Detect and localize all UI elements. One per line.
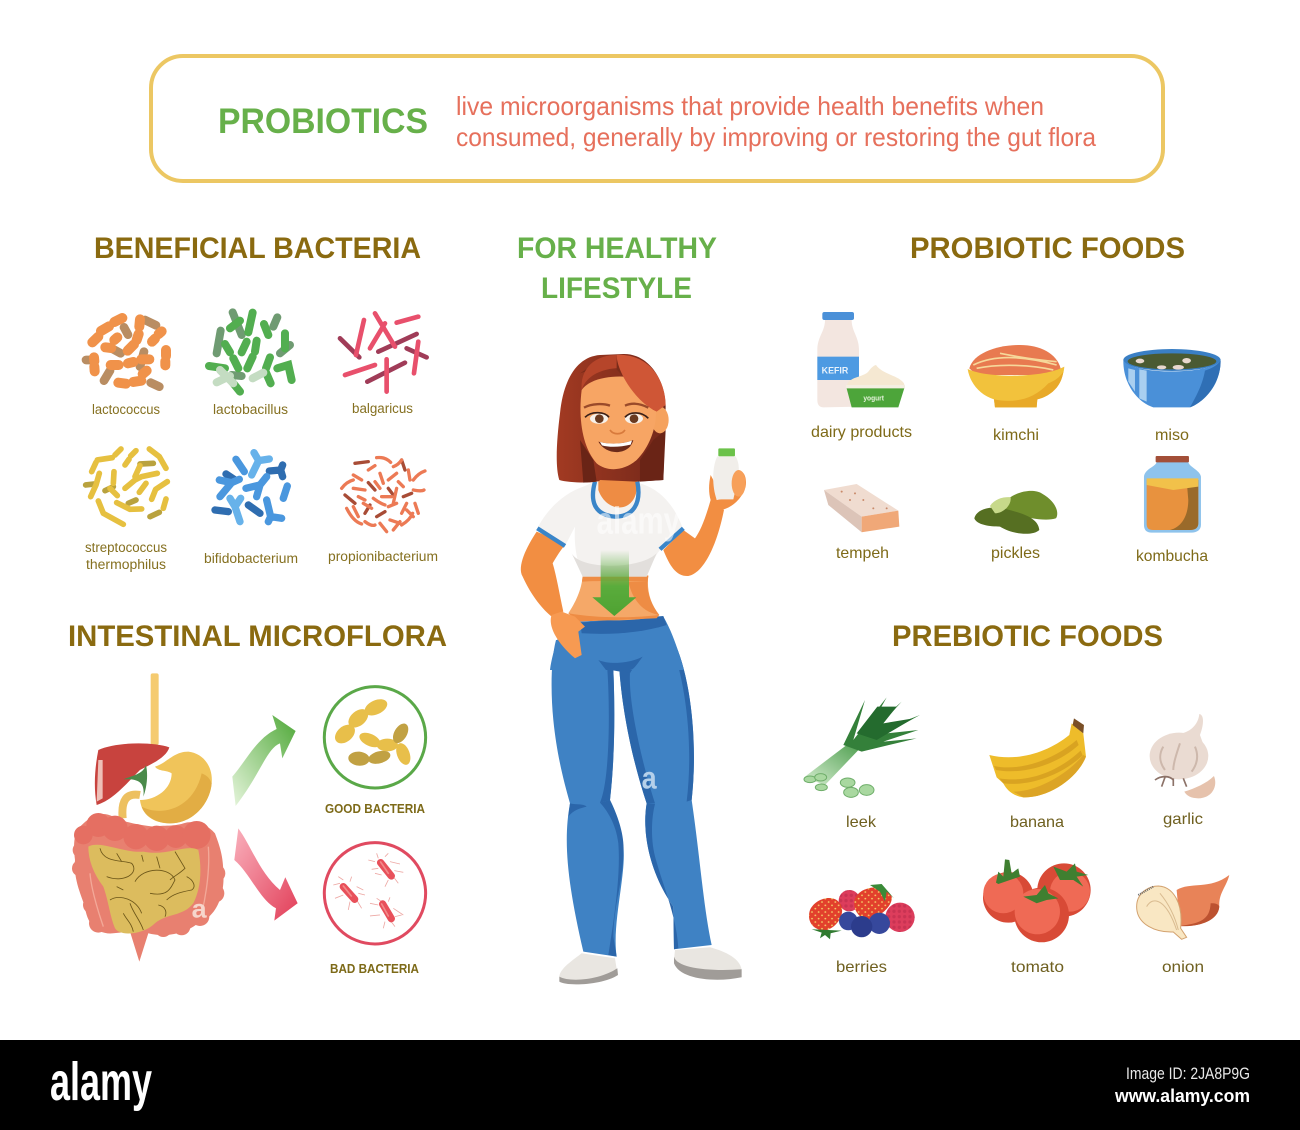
label: bad bacteria: BAD BACTERIA [330,961,420,976]
torso, arms and head: alamy [597,499,681,542]
icon: kimchi [968,345,1064,407]
logo: alamy: alamy [50,1052,152,1112]
heading: prebiotic foods: PREBIOTIC FOODS [892,620,1163,653]
heading: beneficial bacteria: BENEFICIAL BACTERIA [94,232,421,265]
definition text: live microorganisms that provide health benefits when [456,91,1044,121]
icon: lactococcus [86,318,166,387]
label: banana: banana [1010,814,1064,831]
definition box [151,56,1163,181]
torso, arms and head [521,354,746,670]
label: tomato: tomato [1011,959,1064,976]
image id: Image ID: 2JA8P9G [1126,1064,1250,1083]
label: garlic: garlic [1163,811,1203,828]
term: probiotics: PROBIOTICS [218,102,428,141]
label: kombucha: kombucha [1136,548,1208,565]
label: good bacteria: GOOD BACTERIA [325,801,426,816]
label: streptococcus thermophilus [85,540,167,572]
icon: dairy products: yogurt [863,394,884,403]
label: onion: onion [1162,959,1204,976]
legs and shoes [552,640,742,984]
icon: dairy products: KEFIR [822,365,849,375]
label: leek: leek [846,814,877,831]
panel: prebiotic foods [804,697,1229,976]
icon: bifidobacterium [215,453,287,522]
label: berries: berries [836,959,887,976]
icon: good bacteria circle [324,687,426,788]
heading: probiotic foods: PROBIOTIC FOODS [910,232,1185,265]
label: miso: miso [1155,427,1189,444]
footer bar [0,1040,1300,1130]
illustration: woman holding probiotic bottle [521,354,746,984]
label: bifidobacterium: bifidobacterium [204,551,298,566]
heading: for healthy lifestyle: LIFESTYLE [541,272,692,305]
label: lactococcus: lactococcus [92,402,160,417]
label: lactobacillus: lactobacillus [213,402,288,417]
website: www.alamy.com [1114,1086,1250,1106]
icon: balgaricus [340,313,427,392]
heading: intestinal microflora: INTESTINAL MICROFLORA [68,620,447,653]
icon: banana [989,718,1086,797]
icon: bad bacteria circle [324,843,426,944]
label: streptococcus thermophilus: streptococcus [85,540,167,555]
label: balgaricus: balgaricus [352,401,413,416]
icon: kombucha [1144,456,1201,533]
icon: digestive system: a [192,893,207,923]
heading: for healthy lifestyle [517,232,717,305]
label: kimchi: kimchi [993,427,1039,444]
icon: miso [1123,349,1221,407]
label: tempeh: tempeh [836,545,889,562]
arrow: to bad bacteria [234,828,298,921]
panel: beneficial bacteria grid [85,312,438,572]
icon: lactobacillus [209,312,292,392]
label: propionibacterium: propionibacterium [328,549,438,564]
panel: probiotic foods [811,312,1221,565]
label: dairy products: dairy products [811,424,912,441]
icon: tomato [983,859,1091,942]
icon: tempeh [824,484,899,532]
icon: leek [804,697,920,797]
definition text: consumed, generally by improving or restoring the gut flora [456,122,1097,152]
icon: dairy products [817,312,905,407]
icon: garlic [1150,714,1215,798]
definition text [456,91,1097,152]
icon: pickles [974,491,1057,534]
panel: intestinal microflora [72,673,426,976]
icon: propionibacterium [342,458,425,532]
label: streptococcus thermophilus: thermophilus [86,557,166,572]
arrow: to good bacteria [232,715,296,806]
label: pickles: pickles [991,545,1040,562]
icon: digestive system [72,673,225,962]
icon: streptococcus thermophilus [86,449,167,524]
icon: berries [809,884,915,939]
icon: onion [1137,875,1229,939]
heading: for healthy lifestyle: FOR HEALTHY [517,232,717,265]
legs and shoes: a [642,759,657,795]
